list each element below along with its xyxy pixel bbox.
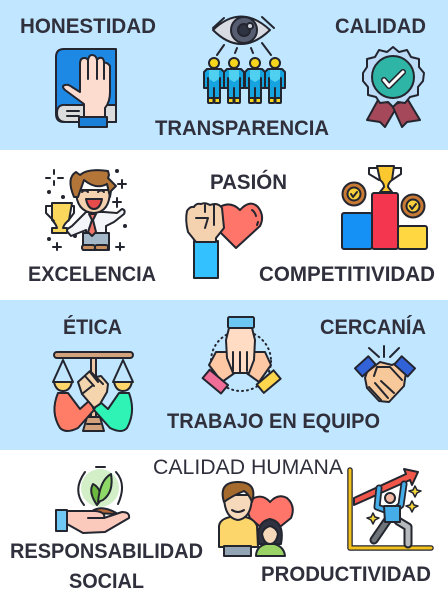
icon: hand on book <box>56 49 116 127</box>
icon: handshake <box>355 346 415 402</box>
icon: four people <box>204 58 285 103</box>
icon: family and heart <box>219 482 293 556</box>
icon: eye <box>213 16 274 55</box>
heading: excelencia: EXCELENCIA <box>28 263 156 286</box>
panel: row 3 <box>0 300 448 450</box>
heading: cercania: CERCANÍA <box>320 316 426 339</box>
heading: calidad: CALIDAD <box>335 15 426 38</box>
heading: pasion: PASIÓN <box>210 170 287 194</box>
panel: row 2 <box>0 150 448 300</box>
heading: social: SOCIAL <box>69 570 144 593</box>
icon: plant in hand <box>56 467 129 533</box>
heading: calidad humana: CALIDAD HUMANA <box>153 456 343 479</box>
panel: row 1 <box>0 0 448 150</box>
icon: man with trophy <box>46 170 126 250</box>
icon: team hands <box>203 317 281 394</box>
heading: productividad: PRODUCTIVIDAD <box>261 563 431 586</box>
icon: scales with arm wrestling <box>53 352 133 431</box>
heading: responsabilidad: RESPONSABILIDAD <box>10 540 203 563</box>
heading: transparencia: TRANSPARENCIA <box>155 117 329 140</box>
panel: row 4 <box>0 450 448 600</box>
icon: quality badge <box>363 47 424 127</box>
heading: competitividad: COMPETITIVIDAD <box>259 263 435 286</box>
icon: podium with medals <box>342 166 427 249</box>
heading: trabajo en equipo: TRABAJO EN EQUIPO <box>167 410 380 433</box>
heading: etica: ÉTICA <box>63 316 122 339</box>
heading: honestidad: HONESTIDAD <box>20 15 156 38</box>
icon: pushing chart arrow <box>350 469 431 548</box>
icon: fist and heart <box>186 203 262 278</box>
